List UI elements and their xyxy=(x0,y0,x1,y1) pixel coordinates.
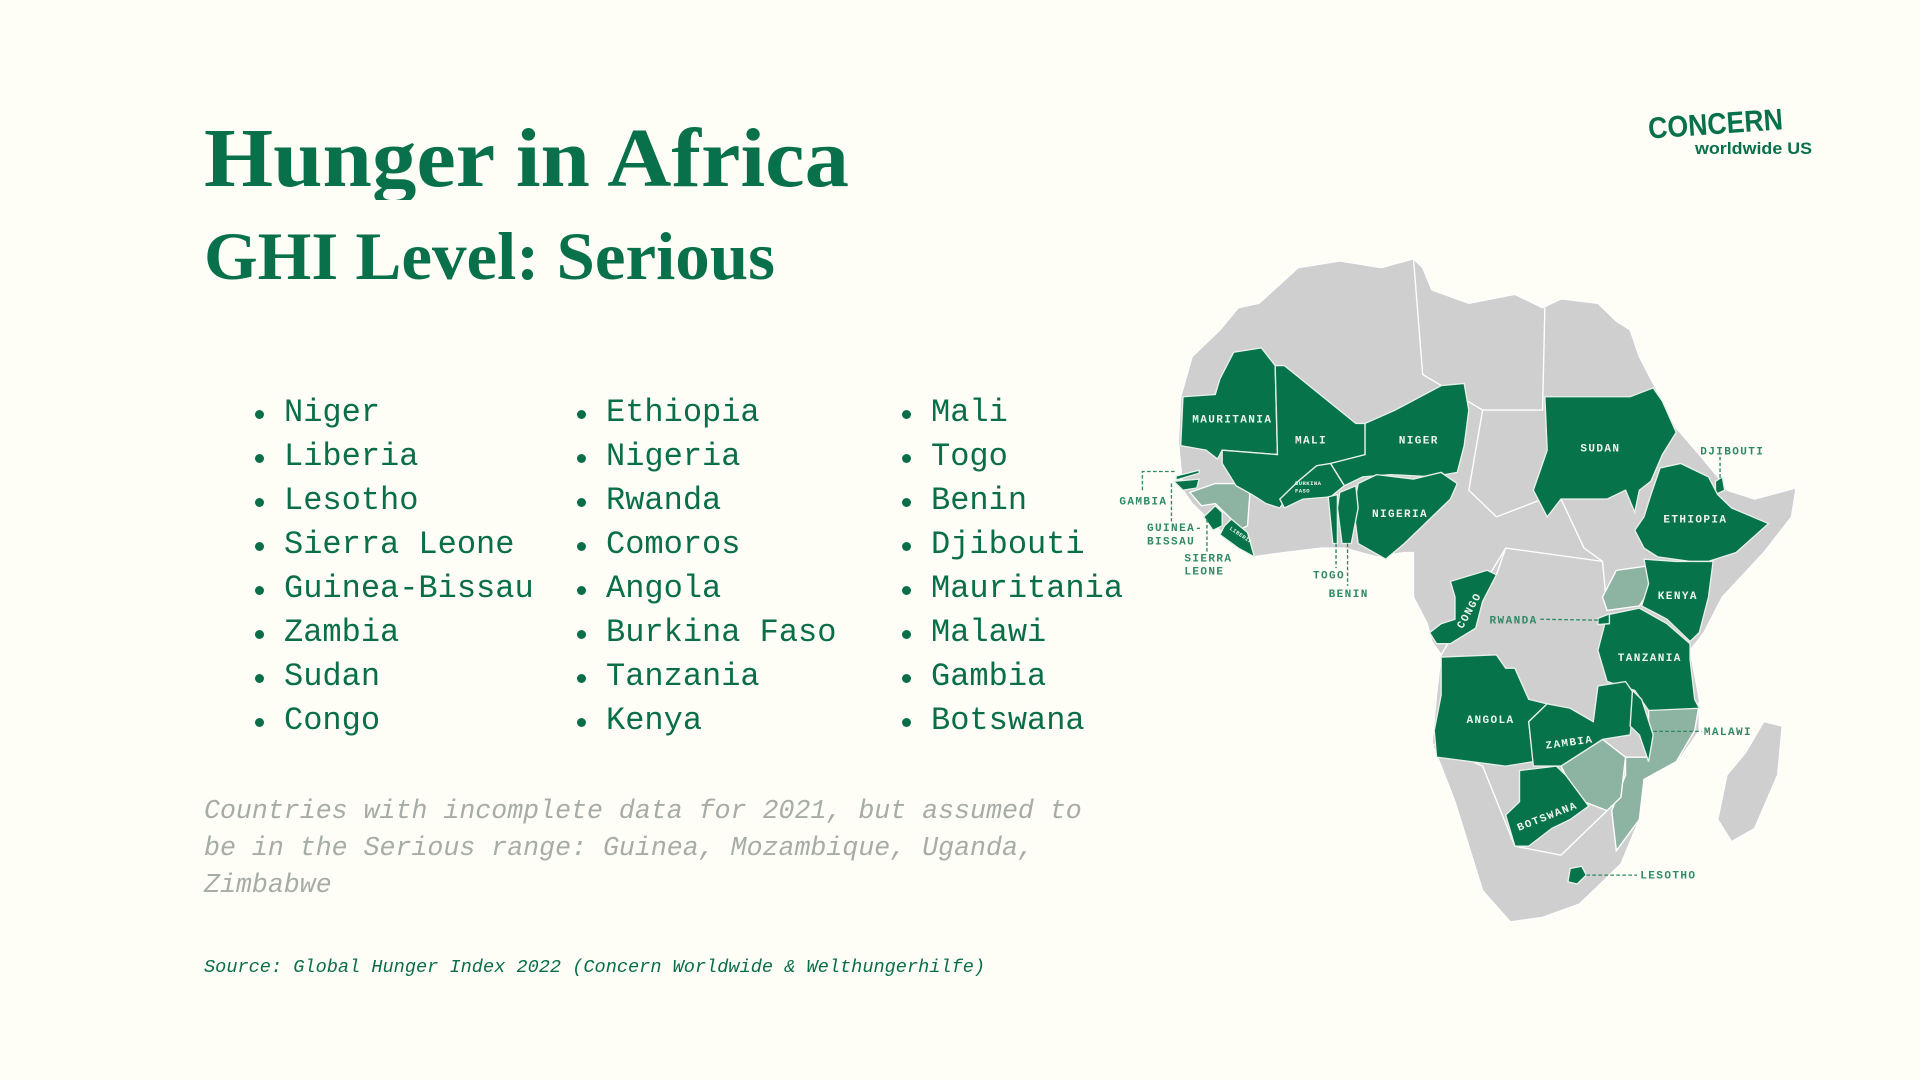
list column 3: Djibouti xyxy=(931,526,1085,563)
continent outline xyxy=(1178,259,1796,922)
list column 1: Zambia xyxy=(284,614,399,651)
list column 1: Liberia xyxy=(284,438,418,475)
list column 3: Mali xyxy=(931,394,1008,431)
country labels inside: NIGER xyxy=(1399,436,1439,447)
country labels inside: CONGO xyxy=(1455,591,1485,631)
list column 2: Kenya xyxy=(606,702,702,739)
country labels inside: LIBERIA xyxy=(1228,525,1254,546)
note text: Countries with incomplete data for 2021, but assumed to xyxy=(204,796,1082,826)
country labels inside: BURKINA xyxy=(1295,480,1322,487)
leader lines xyxy=(1142,457,1720,875)
country labels inside: ANGOLA xyxy=(1466,715,1515,727)
logo: worldwide US xyxy=(1694,139,1812,158)
country labels inside: BOTSWANA xyxy=(1516,800,1580,835)
country labels outside: LEONE xyxy=(1184,567,1224,579)
list column 3: Mauritania xyxy=(931,570,1123,607)
country labels inside: ZAMBIA xyxy=(1545,735,1594,753)
country labels outside xyxy=(1119,447,1764,883)
list column 1: Niger xyxy=(284,394,380,431)
country labels inside xyxy=(1192,415,1727,835)
country labels outside: SIERRA xyxy=(1184,554,1232,565)
subtitle: GHI Level: Serious xyxy=(204,218,775,294)
country labels outside: BENIN xyxy=(1329,589,1369,601)
list column 2: Rwanda xyxy=(606,482,721,519)
note text: be in the Serious range: Guinea, Mozambique, Uganda, xyxy=(204,833,1034,863)
list column 3 xyxy=(902,394,1123,739)
list column 2: Tanzania xyxy=(606,658,760,695)
list column 2 xyxy=(577,394,836,739)
country labels outside: LESOTHO xyxy=(1640,871,1696,883)
country labels inside: SUDAN xyxy=(1580,444,1620,455)
country labels inside: ETHIOPIA xyxy=(1663,515,1727,527)
list column 1: Guinea-Bissau xyxy=(284,570,534,607)
country labels outside: MALAWI xyxy=(1704,727,1752,739)
country labels outside: GAMBIA xyxy=(1119,497,1167,508)
note text: Zimbabwe xyxy=(204,870,332,900)
list column 3: Malawi xyxy=(931,614,1046,651)
list column 1: Lesotho xyxy=(284,482,418,519)
source: Source: Global Hunger Index 2022 (Concern Worldwide & Welthungerhilfe) xyxy=(204,957,985,978)
country labels inside: FASO xyxy=(1295,488,1310,494)
country labels inside: MAURITANIA xyxy=(1192,415,1272,426)
list column 3: Benin xyxy=(931,482,1027,519)
light green countries xyxy=(1190,484,1699,851)
country labels outside: RWANDA xyxy=(1490,616,1538,628)
list column 1: Congo xyxy=(284,702,380,739)
list column 2: Nigeria xyxy=(606,438,740,475)
list column 1 xyxy=(255,394,534,739)
list column 2: Comoros xyxy=(606,526,740,563)
country labels outside: BISSAU xyxy=(1147,537,1195,548)
list column 3: Botswana xyxy=(931,702,1085,739)
country labels inside: TANZANIA xyxy=(1618,653,1682,665)
green countries xyxy=(1174,348,1768,884)
list column 1: Sudan xyxy=(284,658,380,695)
country labels outside: GUINEA- xyxy=(1147,523,1203,535)
list column 3: Togo xyxy=(931,438,1008,475)
list column 3: Gambia xyxy=(931,658,1046,695)
list column 2: Angola xyxy=(606,570,721,607)
note text xyxy=(204,796,1082,900)
list column 2: Burkina Faso xyxy=(606,614,836,651)
country labels inside: NIGERIA xyxy=(1372,509,1428,521)
country labels outside: DJIBOUTI xyxy=(1700,447,1764,459)
country labels inside: KENYA xyxy=(1658,591,1698,603)
list column 1: Sierra Leone xyxy=(284,526,514,563)
country labels inside: MALI xyxy=(1295,436,1327,447)
country labels outside: TOGO xyxy=(1313,570,1345,582)
list column 2: Ethiopia xyxy=(606,394,760,431)
